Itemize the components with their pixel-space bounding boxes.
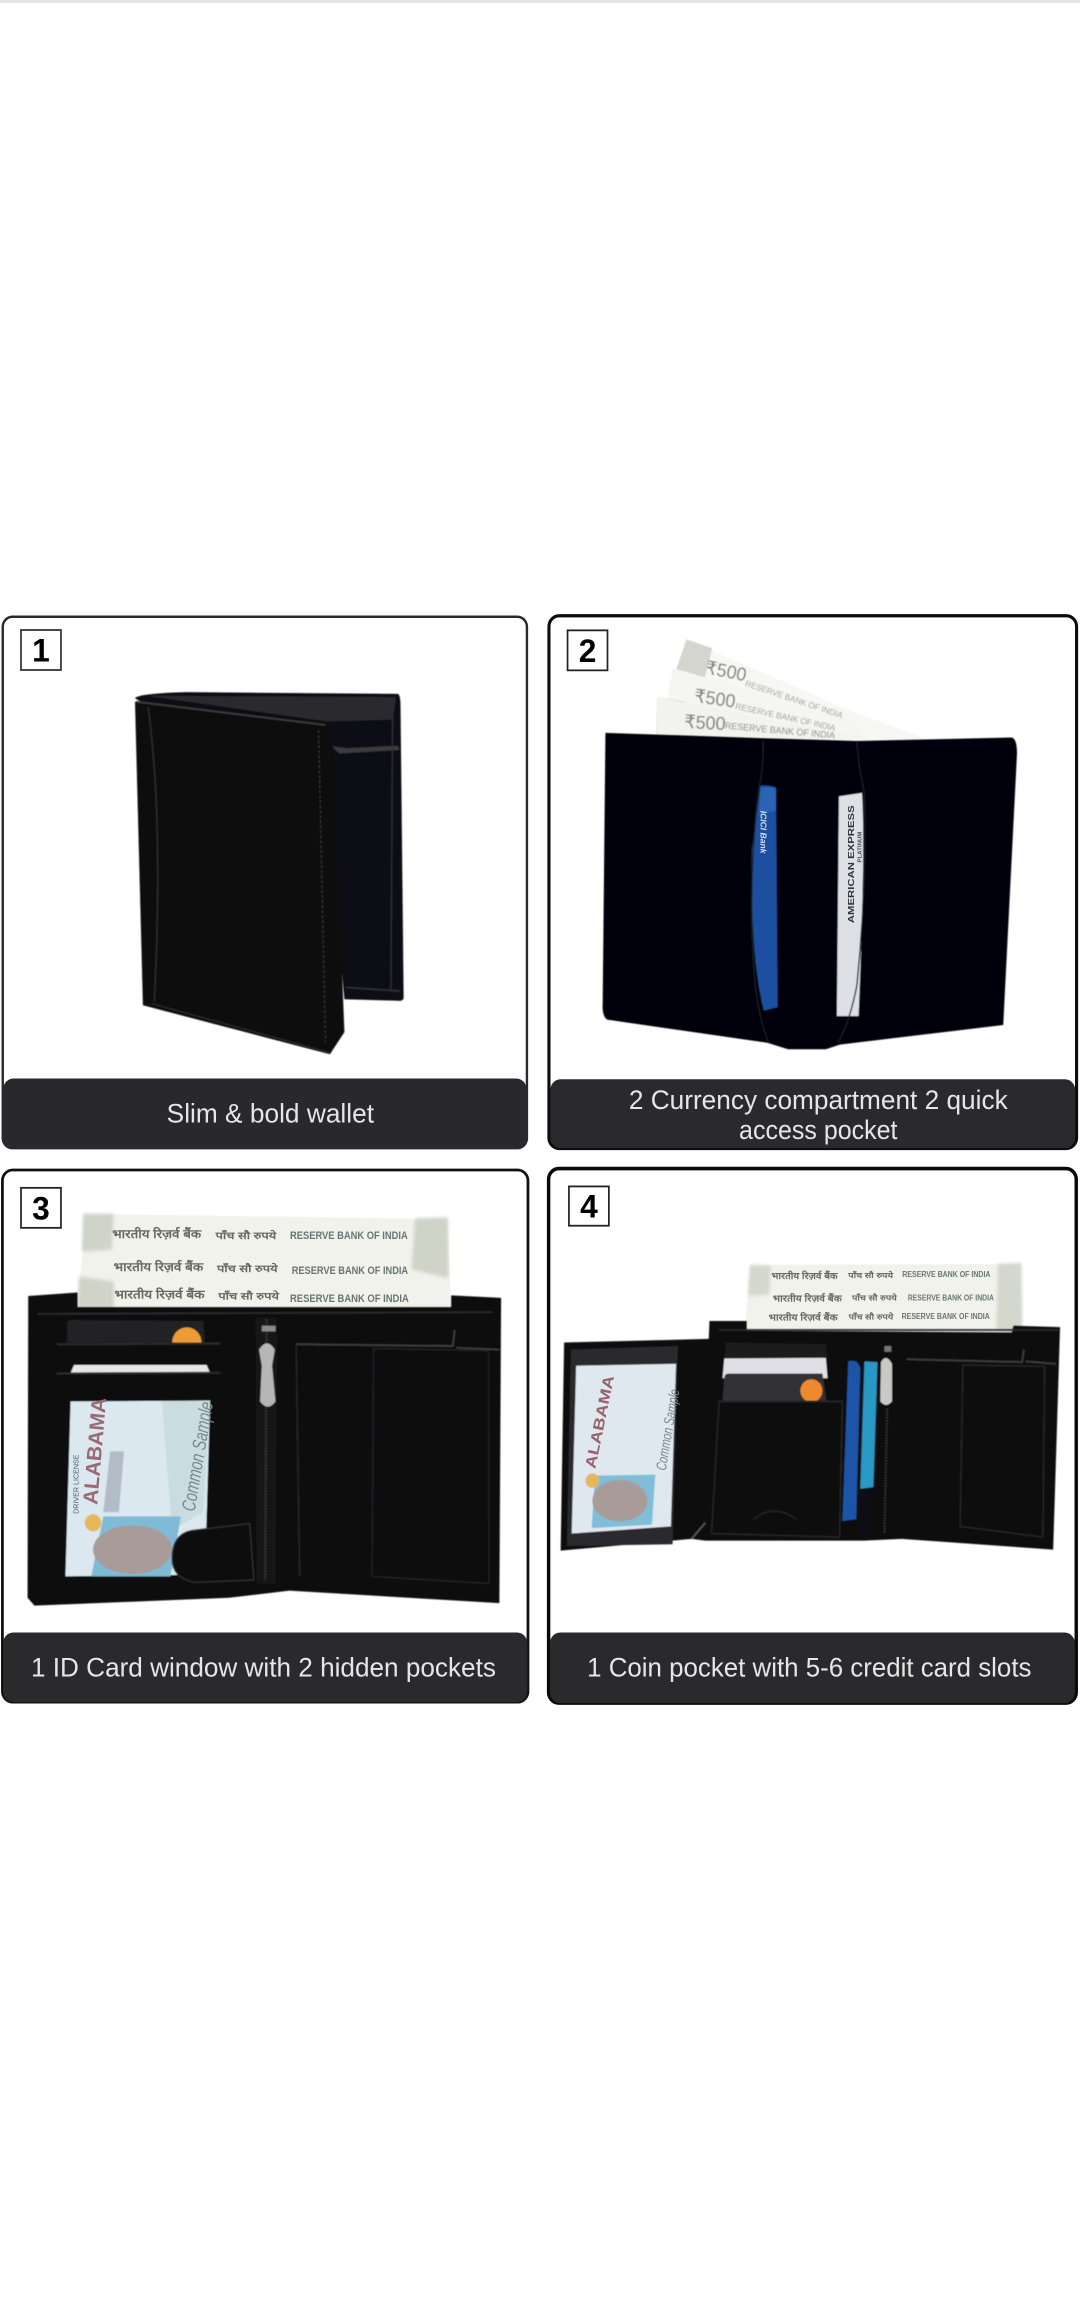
- panel 3: ID card window: [2, 1170, 528, 1702]
- banknotes upright: भारतीय रिज़र्व बैंक: [769, 1312, 839, 1323]
- panel 1 number badge: [21, 630, 61, 670]
- banknotes upright: भारतीय रिज़र्व बैंक: [771, 1270, 839, 1281]
- panel 2: currency compartments and quick access pockets: [549, 616, 1077, 1149]
- fanned banknotes: ₹500: [684, 711, 726, 734]
- banknotes upright: RESERVE BANK OF INDIA: [908, 1294, 994, 1303]
- fanned banknotes: RESERVE BANK OF INDIA: [744, 678, 844, 720]
- card labels: ICICI Bank: [758, 811, 768, 855]
- banknotes upright: भारतीय रिज़र्व बैंक: [114, 1260, 204, 1274]
- panel 3 number badge: [21, 1188, 61, 1228]
- fanned banknotes: ₹500: [693, 685, 737, 712]
- panel 4 number badge: 4: [580, 1188, 598, 1225]
- panel 4 caption bar: 1 Coin pocket with 5-6 credit card slots: [587, 1652, 1031, 1682]
- open trifold wallet: [561, 1321, 1060, 1551]
- panel 3 caption bar: 1 ID Card window with 2 hidden pockets: [31, 1652, 496, 1682]
- panel 2 number badge: [568, 630, 608, 670]
- closed wallet photo: [135, 692, 404, 1054]
- banknotes upright: RESERVE BANK OF INDIA: [290, 1230, 408, 1242]
- banknotes upright: पाँच सौ रुपये: [217, 1290, 281, 1303]
- panel 1: slim and bold wallet: [3, 617, 527, 1148]
- ID card label: DRIVER LICENSE: [74, 1454, 80, 1514]
- banknotes upright: भारतीय रिज़र्व बैंक: [773, 1292, 843, 1303]
- card labels: AMERICAN EXPRESS: [846, 805, 856, 923]
- fanned banknotes: ₹500: [704, 656, 748, 685]
- panel 4 frame: [549, 1169, 1076, 1703]
- panel 3 number badge: 3: [32, 1190, 50, 1226]
- banknotes upright: पाँच सौ रुपये: [851, 1293, 897, 1303]
- banknotes upright: [745, 1263, 1022, 1334]
- top status strip: [0, 0, 1080, 3]
- card labels: PLATINUM: [858, 832, 864, 862]
- panel 2 caption bar: 2 Currency compartment 2 quick: [629, 1084, 1008, 1115]
- banknotes upright: पाँच सौ रुपये: [216, 1263, 279, 1275]
- panel 4 number badge: [569, 1186, 609, 1226]
- panel 2 number badge: 2: [579, 632, 596, 669]
- panel 1 caption bar: Slim & bold wallet: [167, 1098, 375, 1129]
- panel 2 caption bar: access pocket: [739, 1115, 898, 1145]
- banknotes upright: RESERVE BANK OF INDIA: [902, 1270, 991, 1279]
- banknotes upright: पाँच सौ रुपये: [214, 1230, 278, 1242]
- open wallet back view: [603, 733, 1017, 1049]
- fanned banknotes: RESERVE BANK OF INDIA: [724, 720, 836, 741]
- panel 1 frame: [3, 617, 527, 1148]
- panel 3 frame: [2, 1170, 528, 1702]
- banknotes upright: RESERVE BANK OF INDIA: [290, 1293, 409, 1305]
- banknotes upright: RESERVE BANK OF INDIA: [292, 1265, 408, 1277]
- ID card label: ALABAMA: [80, 1397, 111, 1505]
- panel 4 caption bar: [550, 1632, 1075, 1703]
- fanned banknotes: [656, 639, 929, 741]
- panel 2 caption bar: [550, 1079, 1075, 1148]
- banknotes upright: [77, 1214, 451, 1309]
- ID card label: [74, 1397, 218, 1514]
- open wallet with ID window: [28, 1292, 501, 1606]
- banknotes upright: भारतीय रिज़र्व बैंक: [112, 1227, 202, 1241]
- ID card label: ALABAMA: [583, 1374, 618, 1470]
- ID card label: Common Sample: [654, 1388, 683, 1472]
- panel 3 caption bar: [3, 1632, 527, 1702]
- ID card label: [583, 1374, 683, 1472]
- card labels: [758, 805, 864, 923]
- panel 1 number badge: 1: [32, 632, 50, 669]
- fanned banknotes: RESERVE BANK OF INDIA: [735, 701, 837, 733]
- panel 4: coin pocket and card slots: [549, 1169, 1076, 1703]
- banknotes upright: पाँच सौ रुपये: [847, 1270, 894, 1280]
- ID card label: Common Sample: [178, 1400, 218, 1513]
- panel 2 frame: [549, 616, 1077, 1149]
- panel 1 caption bar: [3, 1079, 527, 1148]
- banknotes upright: भारतीय रिज़र्व बैंक: [114, 1287, 206, 1302]
- banknotes upright: RESERVE BANK OF INDIA: [902, 1312, 990, 1321]
- banknotes upright: पाँच सौ रुपये: [847, 1311, 894, 1321]
